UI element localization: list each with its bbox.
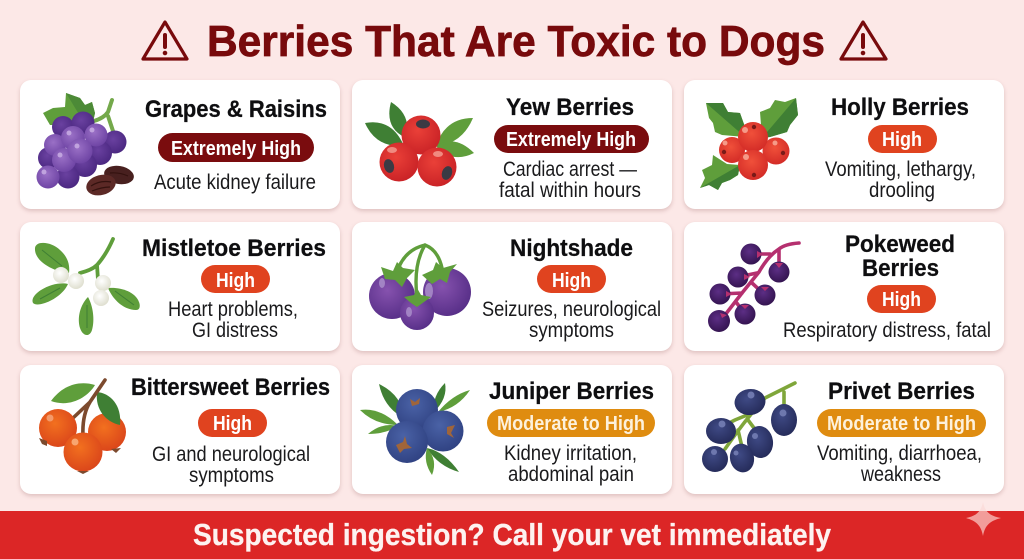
panel: pokeweed berries (684, 222, 1004, 351)
severity badge: Moderate to High (497, 413, 645, 435)
heading: Mistletoe Berries (142, 235, 326, 262)
panel: bittersweet berries (20, 365, 340, 494)
icon: juniper berries (360, 383, 470, 475)
heading: Bittersweet Berries (131, 374, 330, 401)
severity badge: Extremely High (506, 129, 636, 151)
severity badge: High (552, 270, 591, 292)
symptoms: symptoms (529, 319, 614, 342)
panel: yew berries (352, 80, 672, 209)
symptoms: Acute kidney failure (154, 171, 316, 194)
symptoms: Seizures, neurological (482, 298, 661, 321)
icon: warning triangle right (841, 22, 886, 59)
severity badge (537, 265, 606, 293)
severity badge (198, 409, 267, 437)
heading: Juniper Berries (489, 378, 654, 405)
symptoms: weakness (860, 463, 941, 486)
symptoms: GI distress (192, 319, 278, 342)
symptoms: fatal within hours (499, 179, 641, 202)
heading: Holly Berries (831, 94, 969, 121)
severity badge (867, 285, 936, 313)
severity badge: High (216, 270, 255, 292)
icon: bittersweet berries (39, 380, 126, 474)
symptoms: Vomiting, diarrhoea, (817, 442, 982, 465)
symptoms: drooling (869, 179, 935, 202)
symptoms: symptoms (189, 464, 274, 487)
severity badge: High (213, 413, 252, 435)
heading: Yew Berries (506, 94, 634, 121)
symptoms: Kidney irritation, (504, 442, 637, 465)
icon: warning triangle left (143, 22, 187, 59)
severity badge (868, 125, 937, 153)
heading: Nightshade (510, 235, 633, 262)
panel: juniper berries (352, 365, 672, 494)
symptoms: Vomiting, lethargy, (825, 158, 976, 181)
severity badge: High (882, 289, 921, 311)
banner text: Suspected ingestion? Call your vet immediately (193, 517, 832, 552)
heading: Grapes & Raisins (145, 96, 327, 123)
symptoms: GI and neurological (152, 443, 310, 466)
heading: Pokeweed (845, 231, 955, 258)
panel: holly berries (684, 80, 1004, 209)
panel: mistletoe berries (20, 222, 340, 351)
severity badge (201, 265, 270, 293)
symptoms: Heart problems, (168, 298, 298, 321)
severity badge: Extremely High (171, 138, 301, 160)
icon: grapes and raisins (36, 93, 135, 199)
icon: pokeweed berries (708, 243, 799, 332)
icon: sparkle (966, 502, 1001, 536)
symptoms: abdominal pain (508, 463, 634, 486)
symptoms: Respiratory distress, fatal (783, 319, 991, 342)
heading: Berries (862, 255, 939, 282)
heading: Privet Berries (828, 378, 975, 405)
title: Berries That Are Toxic to Dogs (207, 17, 825, 66)
icon: privet berries (702, 383, 797, 475)
severity badge: High (882, 129, 922, 151)
panel: nightshade (352, 222, 672, 351)
icon: holly berries (700, 98, 798, 190)
severity badge (158, 133, 314, 162)
icon: yew berries (365, 102, 474, 186)
icon: nightshade (369, 245, 471, 330)
panel: privet berries (684, 365, 1004, 494)
footer banner (0, 511, 1024, 559)
symptoms: Cardiac arrest — (503, 158, 637, 181)
severity badge: Moderate to High (827, 413, 976, 435)
icon: mistletoe berries (33, 239, 140, 335)
panel: grapes and raisins (20, 80, 340, 209)
